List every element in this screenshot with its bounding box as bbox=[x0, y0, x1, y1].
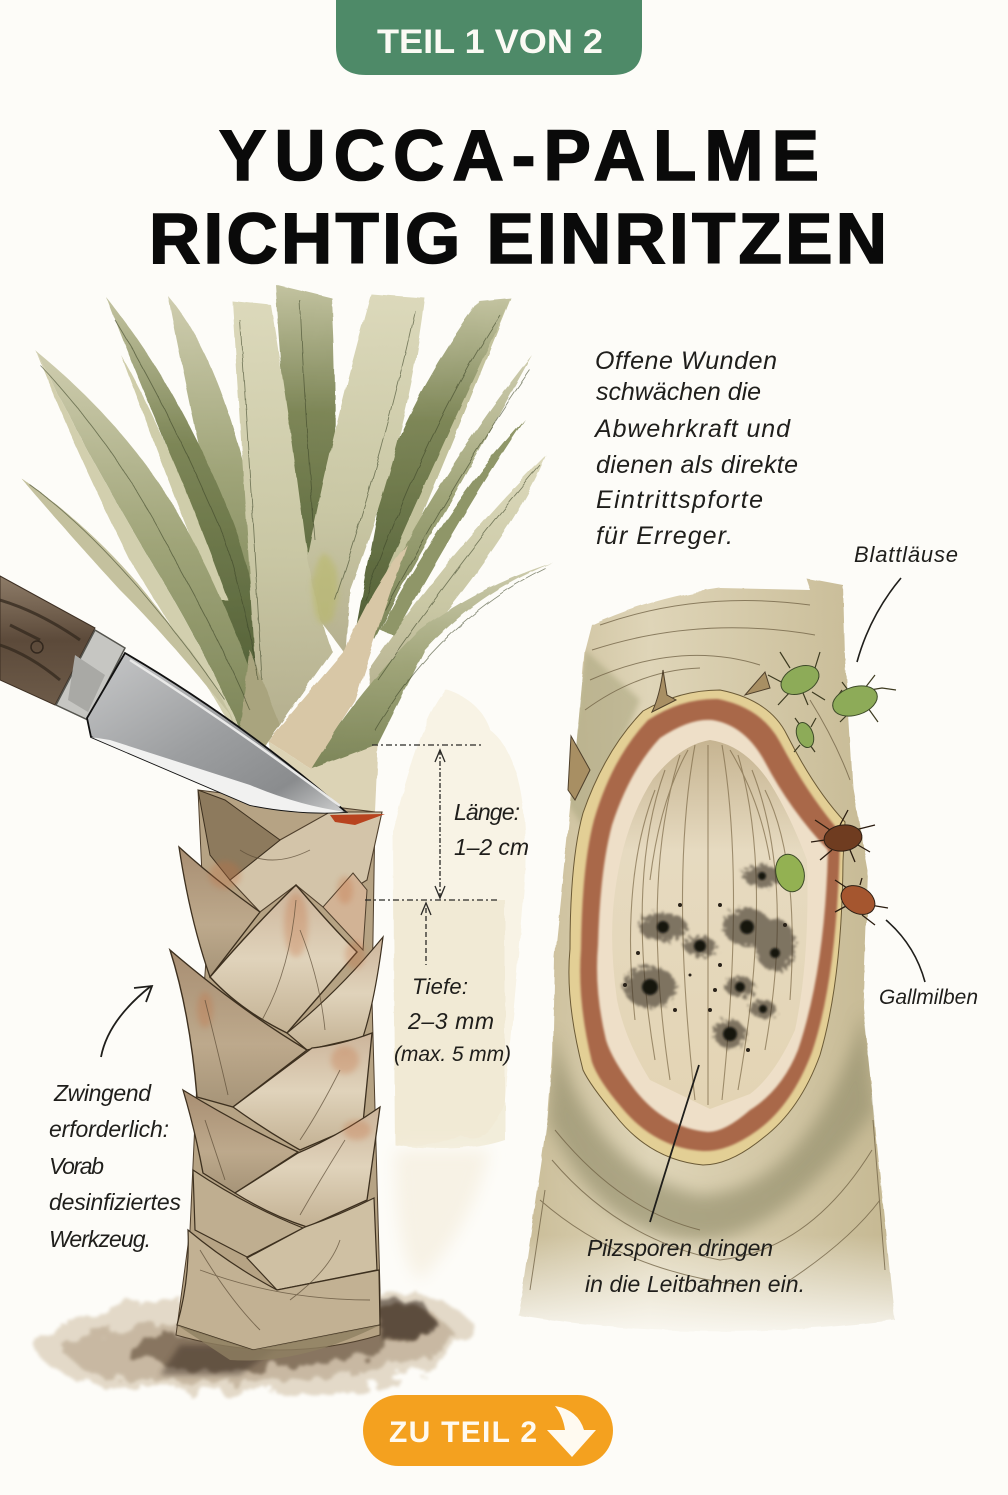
label: Gallmilben: Gallmilben bbox=[879, 986, 978, 1009]
title: RICHTIG EINRITZEN bbox=[149, 200, 887, 279]
title: YUCCA-PALME bbox=[219, 117, 819, 196]
note: Offene Wunden: Abwehrkraft und bbox=[593, 415, 791, 443]
knife bbox=[0, 576, 385, 825]
note: Werkzeug: erforderlich: bbox=[49, 1116, 169, 1142]
label: Blattläuse: Blattläuse bbox=[854, 542, 958, 567]
label: 1-2 cm: 1–2 cm bbox=[454, 834, 529, 860]
trunk bbox=[170, 790, 383, 1361]
note: Offene Wunden: dienen als direkte bbox=[596, 451, 798, 479]
badge: Teil 1 von 2 bbox=[336, 0, 642, 75]
wound core bbox=[612, 740, 808, 1109]
soil bbox=[30, 1290, 470, 1392]
note: Offene Wunden: Offene Wunden bbox=[595, 347, 777, 375]
measurement lines bbox=[365, 745, 500, 965]
note: Werkzeug: desinfiziertes bbox=[49, 1189, 182, 1215]
button: zu Teil 2: ZU TEIL 2 bbox=[389, 1416, 537, 1449]
label: Länge: Länge: bbox=[454, 799, 520, 825]
label: Tiefe: (max. 5 mm) bbox=[394, 1043, 511, 1066]
note: Werkzeug: Vorab bbox=[49, 1153, 104, 1179]
scale: top bbox=[230, 812, 382, 912]
illustration: yucca palm with knife bbox=[0, 284, 553, 1392]
note: Offene Wunden: für Erreger. bbox=[596, 522, 733, 550]
label: Pilzsporen: Pilzsporen dringen bbox=[587, 1235, 773, 1261]
gall mites bbox=[811, 810, 888, 925]
label: Blattläuse bbox=[854, 542, 958, 662]
label: Gallmilben bbox=[879, 920, 978, 1009]
badge: Teil 1 von 2: TEIL 1 VON 2 bbox=[377, 23, 603, 61]
fungal spores bbox=[623, 865, 795, 1052]
watercolor wash behind measures bbox=[393, 690, 526, 1280]
note: Werkzeug: Zwingend bbox=[53, 1080, 152, 1106]
label: Tiefe: 2–3 mm bbox=[407, 1008, 494, 1034]
wound rim bbox=[569, 690, 845, 1165]
bark thorns bbox=[568, 670, 770, 800]
note: Offene Wunden: schwächen die bbox=[596, 378, 761, 406]
button: zu Teil 2 bbox=[363, 1395, 613, 1466]
label: Pilzsporen bbox=[585, 1065, 805, 1297]
label: Tiefe bbox=[394, 974, 511, 1066]
note: Werkzeug: Werkzeug. bbox=[49, 1226, 151, 1252]
icon: arrow bbox=[547, 1406, 596, 1457]
title bbox=[149, 117, 887, 279]
wound bark ring bbox=[580, 699, 840, 1151]
leaves bbox=[21, 284, 553, 815]
label: Pilzsporen: in die Leitbahnen ein. bbox=[585, 1271, 805, 1297]
arrow: to knife bbox=[101, 986, 152, 1057]
note: Offene Wunden: Eintrittspforte bbox=[596, 486, 763, 514]
note: Offene Wunden bbox=[593, 347, 798, 550]
label: Tiefe: Tiefe: bbox=[412, 974, 468, 999]
wound inner ring bbox=[597, 720, 828, 1132]
note: Werkzeug bbox=[49, 1080, 182, 1252]
aphids bbox=[768, 652, 896, 895]
illustration: wounded trunk bbox=[500, 578, 910, 1345]
